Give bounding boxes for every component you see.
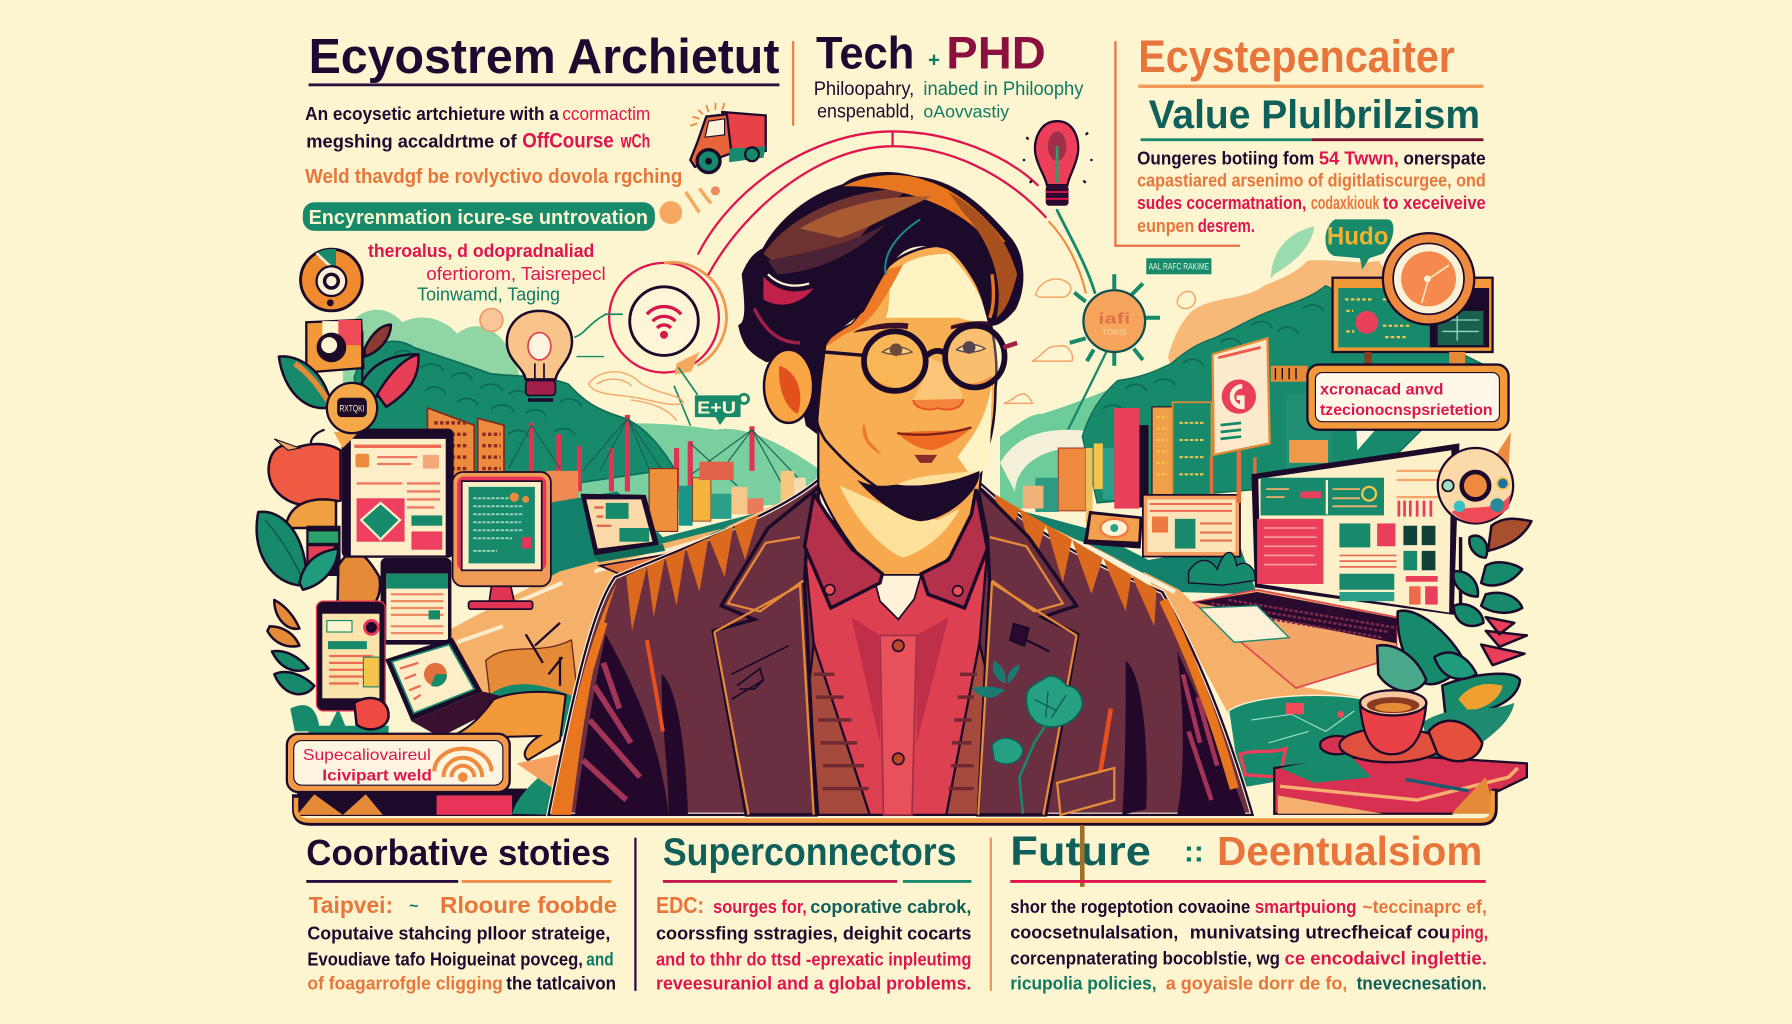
small apple xyxy=(354,698,389,729)
heading: PHD xyxy=(946,28,1046,79)
flower brooch xyxy=(971,661,1082,814)
heading: Tech xyxy=(816,28,914,79)
intro paragraph xyxy=(305,103,682,188)
icon: apple xyxy=(269,430,341,528)
body text: a goyaisle dorr de fo, xyxy=(1166,973,1347,994)
book stack xyxy=(1274,754,1527,814)
buildings: left tower xyxy=(427,408,504,491)
body text xyxy=(1010,896,1488,994)
description: Philoopahry, xyxy=(814,78,914,100)
decorative orange marks xyxy=(659,186,720,224)
scene corner xyxy=(1451,777,1495,814)
icon: coffee cup xyxy=(1320,690,1442,762)
paragraph: Oungeres botiing fom xyxy=(1137,148,1314,169)
body text: Taipvei: xyxy=(309,892,393,918)
panel: Cooperative stories xyxy=(306,832,617,994)
neck xyxy=(818,425,983,577)
panel: Ecosystem Architecture xyxy=(303,30,779,305)
road right xyxy=(1000,503,1360,714)
goatee beard xyxy=(857,471,980,521)
heading: :: xyxy=(1184,836,1204,869)
person: portrait xyxy=(549,173,1253,815)
peach cloud xyxy=(1168,260,1440,389)
hand on laptop xyxy=(452,692,566,760)
heading: Deentualsiom xyxy=(1217,828,1482,874)
body text: tnevecnesation. xyxy=(1357,973,1487,994)
books on road xyxy=(600,553,709,583)
paragraph: desrem. xyxy=(1198,215,1255,236)
phone 2 xyxy=(381,558,451,645)
forehead highlight xyxy=(886,254,990,326)
plant: big leaf xyxy=(257,512,389,743)
shoulder fringes xyxy=(626,514,759,631)
body text: the tatlcaivon xyxy=(506,973,616,994)
chin highlight xyxy=(895,471,977,494)
heading: Coorbative stoties xyxy=(306,832,610,873)
body text: Evoudiave tafo Hoigueinat povceg, xyxy=(307,949,583,970)
callout: Supecaliovaireul: Supecaliovaireul xyxy=(303,747,431,764)
desktop monitor xyxy=(453,472,551,609)
small teal tag: AAL RAFC RAKIME xyxy=(1149,262,1209,272)
intro paragraph: ccormactim xyxy=(562,103,650,124)
panel: Tech + PHD xyxy=(792,28,1084,126)
lower scene band xyxy=(297,754,560,816)
city skyline xyxy=(546,462,806,531)
body text: reveesuraniol and a global problems. xyxy=(656,973,971,994)
road laptop xyxy=(581,494,665,562)
description: inabed in Philoophy xyxy=(923,78,1084,100)
body text: ~ xyxy=(409,898,418,915)
callout: technical notes: tzecionocnspsrietetion xyxy=(1320,402,1493,419)
jacket xyxy=(549,480,1253,815)
paragraph xyxy=(1137,148,1486,236)
pocket xyxy=(1057,768,1114,815)
paragraph: to xeceiveive xyxy=(1383,192,1486,213)
paragraph: 54 Twwn, xyxy=(1319,148,1399,169)
paragraph: codaxkiouk xyxy=(1311,192,1380,213)
coloured notes xyxy=(368,240,606,305)
paragraph: sudes cocermatnation, xyxy=(1137,192,1306,213)
city: right buildings xyxy=(1023,366,1331,549)
icon: sun badge xyxy=(1070,274,1160,366)
icon: sun badge: iafi xyxy=(1098,311,1130,327)
body text: and to thhr do ttsd -eprexatic inpleutimg xyxy=(656,949,971,970)
icon: sun badge: TORIS xyxy=(1102,328,1127,337)
body text: of foagarrofgle cligging xyxy=(307,973,503,994)
heading: Superconnectors xyxy=(663,831,957,874)
glasses xyxy=(797,326,1017,391)
icon: hexagon cube xyxy=(306,320,363,373)
icon: doodle swirl xyxy=(589,372,683,421)
callout: Supecaliovaireul xyxy=(287,734,510,792)
intro paragraph: An ecoysetic artchieture with a xyxy=(305,103,560,124)
body text: EDC: xyxy=(656,892,704,918)
icon: left light bulb xyxy=(507,311,572,400)
scene frame xyxy=(295,789,1495,823)
body text: ricupolia policies, xyxy=(1010,973,1157,994)
knit vest xyxy=(809,643,990,815)
heading: Ecyostrem Archietut xyxy=(309,30,779,84)
panel: Future Decentralism xyxy=(1010,825,1488,994)
ear xyxy=(764,350,813,423)
speech bubble: Hudo xyxy=(1325,219,1393,270)
icon: clock dial xyxy=(1383,233,1474,325)
body text: munivatsing utrecfheicaf cou xyxy=(1190,921,1450,942)
icon: palette orb xyxy=(1438,432,1513,523)
bridge pylons xyxy=(509,415,800,491)
body text: ce encodaivcl inglettie. xyxy=(1285,948,1487,969)
body text: Coputaive stahcing pIloor strateige, xyxy=(307,922,610,943)
description: oAovvastiy xyxy=(923,102,1010,122)
eyes xyxy=(882,344,985,355)
panel: left landscape scene xyxy=(343,310,818,737)
panel: left device cluster xyxy=(257,320,566,816)
screen: small teal xyxy=(1083,511,1143,549)
icon: red light bulb xyxy=(1023,121,1093,206)
green tag: E+U xyxy=(695,394,749,425)
intro paragraph: Weld thavdgf be rovlyctivo dovola rgching xyxy=(305,165,682,188)
nose xyxy=(913,357,963,409)
phone 3 xyxy=(317,601,385,711)
coloured notes: Toinwamd, Taging xyxy=(417,284,560,305)
body text: coporative cabrok, xyxy=(810,896,971,917)
screen: roadside monitor xyxy=(1143,495,1240,557)
body text: coorssfing sstragies, deighit cocarts xyxy=(656,922,971,943)
paragraph: capastiared arsenimo of digitlatiscurgee, ond xyxy=(1137,169,1486,190)
callout: Supecaliovaireul: Icivipart weld xyxy=(322,768,432,785)
small teal tag xyxy=(1146,258,1211,274)
body text xyxy=(656,892,971,994)
heading: + xyxy=(928,48,940,71)
green tag: E+U: E+U xyxy=(697,398,736,418)
icon: coin xyxy=(480,309,503,331)
intro paragraph: wCh xyxy=(620,130,650,152)
body text: corcenpnaterating bocoblstie, wg xyxy=(1010,948,1280,969)
description xyxy=(814,78,1084,123)
panel: Superconnectors xyxy=(656,831,971,994)
icon: wifi circle xyxy=(605,262,726,375)
coloured notes: theroalus, d odopradnaliad xyxy=(368,240,594,261)
heading: Future xyxy=(1010,828,1151,874)
fruit beside cup xyxy=(1429,721,1482,761)
intro paragraph: OffCourse xyxy=(522,127,614,152)
map on table xyxy=(1229,695,1371,789)
dashboard sign xyxy=(1333,278,1493,366)
intro paragraph: megshing accaldrtme of xyxy=(306,130,517,151)
body text: and xyxy=(586,949,614,970)
panel: Value Pluralism xyxy=(1115,31,1486,246)
icon: delivery truck xyxy=(690,103,766,173)
callout: technical notes xyxy=(1307,365,1509,453)
hills: right xyxy=(1082,286,1486,503)
shirt xyxy=(805,491,987,815)
pin bubble: RXTQKI xyxy=(339,403,365,413)
icon: donut chart xyxy=(301,249,362,311)
road xyxy=(451,485,818,731)
doodle clouds right xyxy=(1003,279,1195,403)
pin bubble xyxy=(327,383,377,448)
heading rule xyxy=(309,83,779,86)
icon: signal arcs xyxy=(434,749,491,780)
arcs linking icons around the head xyxy=(575,131,1106,429)
small laptop xyxy=(385,638,514,737)
teal ground strip xyxy=(549,491,814,577)
right arm folds xyxy=(1177,651,1246,815)
body text: ping, xyxy=(1451,921,1488,942)
panel: right landscape scene xyxy=(1000,219,1531,814)
body text: Rlooure foobde xyxy=(440,892,617,918)
teal ground right xyxy=(1000,505,1257,594)
body text xyxy=(307,892,617,994)
description: enspenabld, xyxy=(817,101,914,123)
hills: left xyxy=(354,341,674,514)
body text: shor the rogeptotion covaoine xyxy=(1010,896,1250,917)
paragraph: onerspate xyxy=(1403,148,1486,169)
green leaf xyxy=(1271,226,1314,279)
tablet 1 xyxy=(342,429,454,558)
plant: upper leaves xyxy=(279,325,419,434)
left arm folds xyxy=(551,583,617,815)
mouth xyxy=(897,429,970,450)
coloured notes: ofertiorom, Taisrepecl xyxy=(426,263,606,284)
speech bubble: Hudo: Hudo xyxy=(1327,223,1389,251)
heading: Ecystepencaiter xyxy=(1138,31,1455,82)
body text: sourges for, xyxy=(713,896,807,917)
poster xyxy=(1213,338,1270,503)
eyebrows xyxy=(853,321,992,333)
plants: right leaves xyxy=(1377,519,1531,766)
body text: ~teccinaprc ef, xyxy=(1362,896,1487,917)
paragraph: eunpen xyxy=(1137,215,1194,236)
hair xyxy=(739,173,1022,432)
foliage by road xyxy=(486,640,577,731)
green highlight pill: Encyrenmation icure-se untrovation xyxy=(309,206,648,229)
callout: technical notes: xcronacad anvd xyxy=(1320,381,1443,398)
heading xyxy=(1010,825,1482,887)
subheading: Value Plulbrilzism xyxy=(1149,93,1480,137)
body text: smartpuiong xyxy=(1255,896,1357,917)
face xyxy=(817,246,996,510)
lapels xyxy=(713,486,1078,815)
plant: roadside xyxy=(1189,552,1255,585)
body text: coocsetnulaIsation, xyxy=(1010,921,1178,942)
big laptop xyxy=(1193,443,1459,688)
heading xyxy=(816,28,1046,79)
undershirt and collars xyxy=(805,489,987,619)
